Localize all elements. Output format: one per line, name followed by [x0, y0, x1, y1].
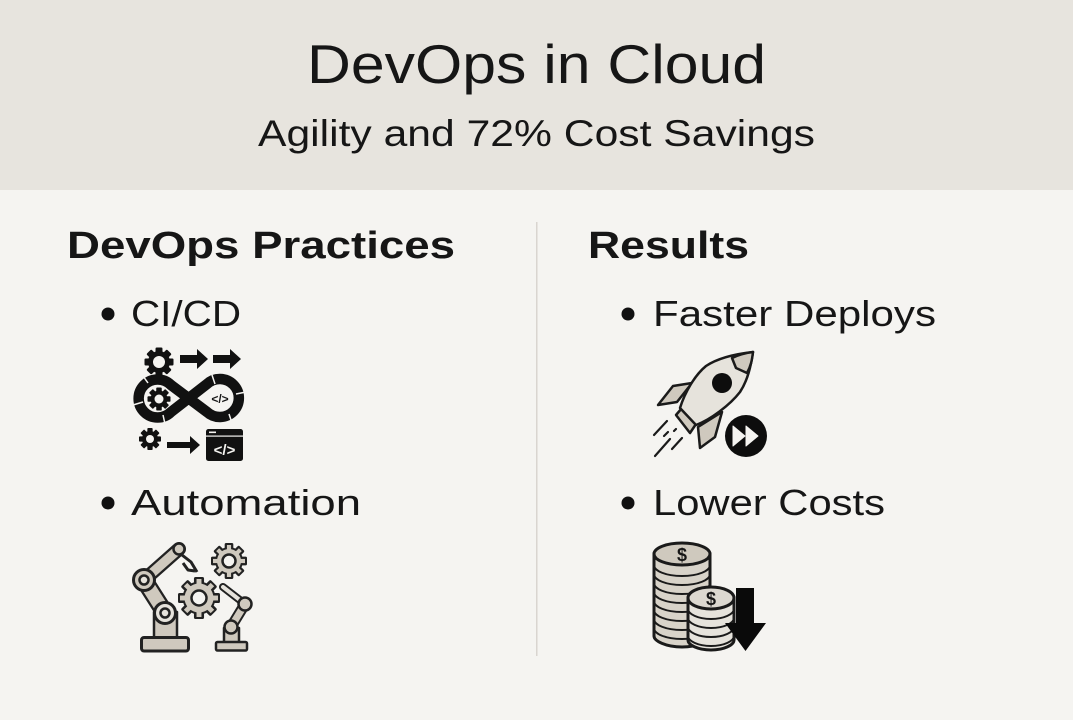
panel: DevOps practices	[67, 225, 455, 651]
icon: CI/CD infinity loop	[133, 348, 246, 461]
heading: DevOps Practices: DevOps Practices	[67, 225, 455, 267]
icon: coin stacks with down arrow: $	[677, 545, 687, 565]
heading: Results: Results	[588, 225, 749, 267]
list item: Faster Deploys: Faster Deploys	[653, 293, 936, 334]
list item: Automation: Automation	[131, 482, 361, 523]
icon: robot arms and gears	[134, 543, 252, 651]
panel: results	[588, 225, 936, 651]
icon: CI/CD infinity loop: </>	[214, 442, 236, 459]
header banner	[0, 0, 1073, 190]
list item: Lower Costs: Lower Costs	[653, 482, 885, 523]
title: DevOps in Cloud	[307, 33, 766, 95]
icon: rocket with fast-forward badge	[654, 352, 767, 457]
icon: coin stacks with down arrow	[654, 543, 766, 651]
icon: coin stacks with down arrow: $	[706, 589, 716, 609]
icon: CI/CD infinity loop: </>	[211, 392, 229, 406]
list item: CI/CD: CI/CD	[131, 293, 241, 334]
subtitle: Agility and 72% Cost Savings	[258, 113, 815, 154]
